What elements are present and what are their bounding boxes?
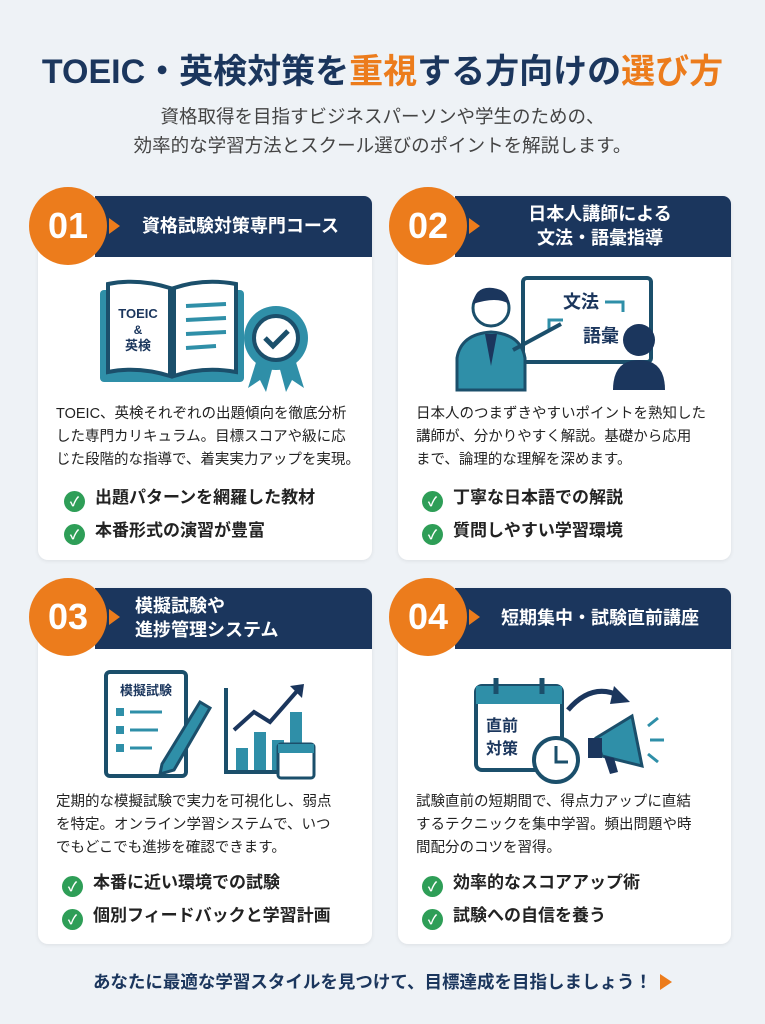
checklist 04: 効率的なスコアアップ術 [453, 873, 640, 892]
header 03: 模擬試験や [135, 596, 225, 616]
badge 04: 04 [408, 596, 448, 637]
header 02 [455, 196, 731, 257]
icon: book and badge [100, 280, 308, 392]
checklist 02: ✓ [428, 527, 437, 542]
checklist 04 [422, 873, 640, 930]
description 04 [416, 793, 692, 856]
description 01 [56, 405, 360, 468]
description 01: じた段階的な指導で、着実実力アップを実現。 [56, 452, 360, 468]
panel: 03 [38, 588, 372, 944]
badge 03: 03 [48, 596, 88, 637]
description 03: 定期的な模擬試験で実力を可視化し、弱点 [56, 794, 332, 810]
icon: teacher with board [456, 276, 665, 392]
badge 02: 02 [408, 205, 448, 246]
checklist 01: 本番形式の演習が豊富 [95, 521, 265, 540]
description 04: 試験直前の短期間で、得点力アップに直結 [416, 794, 691, 810]
description 03: を特定。オンライン学習システムで、いつ [56, 817, 330, 833]
description 02: 日本人のつまずきやすいポイントを熟知した [416, 406, 706, 422]
header 02: 日本人講師による [528, 204, 672, 224]
description 04: するテクニックを集中学習。頻出問題や時 [416, 817, 692, 833]
icon: calendar, clock, megaphone [474, 678, 664, 784]
description 01: した専門カリキュラム。目標スコアや級に応 [56, 429, 346, 445]
badge 01: 01 [48, 205, 88, 246]
badge 02 [389, 187, 480, 265]
title: TOEIC・英検対策を重視する方向けの選び方 [42, 53, 723, 91]
checklist 03: 個別フィードバックと学習計画 [93, 906, 331, 925]
icon: mock exam and chart [104, 670, 316, 780]
description 04: 間配分のコツを習得。 [416, 840, 561, 856]
description 01: TOEIC、英検それぞれの出題傾向を徹底分析 [56, 406, 347, 422]
footer message: あなたに最適な学習スタイルを見つけて、目標達成を目指しましょう！ [93, 972, 652, 992]
panel: 01 [38, 196, 372, 560]
checklist 01: 出題パターンを網羅した教材 [95, 488, 315, 507]
icon: book and badge: & [134, 323, 143, 337]
checklist 04: 試験への自信を養う [453, 906, 606, 925]
description 02: まで、論理的な理解を深めます。 [416, 452, 631, 468]
subtitle [134, 106, 631, 156]
checklist 04: ✓ [428, 912, 437, 927]
checklist 03: 本番に近い環境での試験 [93, 873, 280, 892]
header 03 [95, 588, 372, 649]
header 04: 短期集中・試験直前講座 [501, 608, 699, 628]
icon: book and badge: 英検 [125, 338, 151, 353]
checklist 01: ✓ [70, 527, 79, 542]
subtitle: 効率的な学習方法とスクール選びのポイントを解説します。 [134, 135, 631, 156]
icon: teacher with board: 語彙 [583, 326, 619, 346]
checklist 01 [64, 488, 315, 545]
panel: 04 [398, 588, 731, 944]
description 02 [416, 405, 706, 468]
header 01: 資格試験対策専門コース [142, 216, 339, 236]
icon: mock exam and chart: 模擬試験 [120, 683, 172, 698]
panel: 02 [398, 196, 731, 560]
checklist 02 [422, 488, 623, 545]
icon: calendar, clock, megaphone: 対策 [486, 739, 518, 758]
checklist 02: 質問しやすい学習環境 [453, 521, 623, 540]
icon: calendar, clock, megaphone: 直前 [486, 716, 518, 735]
icon: book and badge: TOEIC [118, 306, 158, 321]
header 02: 文法・語彙指導 [537, 228, 663, 248]
badge 04 [389, 578, 480, 656]
header 01 [95, 196, 372, 257]
badge 03 [29, 578, 120, 656]
header 04 [455, 588, 731, 649]
description 03 [56, 793, 332, 856]
checklist 03 [62, 873, 331, 930]
checklist 01: ✓ [70, 494, 79, 509]
description 03: でもどこでも進捗を確認できます。 [56, 840, 286, 856]
badge 01 [29, 187, 120, 265]
checklist 02: 丁寧な日本語での解説 [453, 488, 623, 507]
checklist 04: ✓ [428, 879, 437, 894]
icon: teacher with board: 文法 [563, 292, 599, 312]
description 02: 講師が、分かりやすく解説。基礎から応用 [416, 429, 691, 445]
checklist 03: ✓ [68, 912, 77, 927]
header 03: 進捗管理システム [135, 620, 278, 640]
checklist 02: ✓ [428, 494, 437, 509]
subtitle: 資格取得を目指すビジネスパーソンや学生のための、 [160, 106, 604, 127]
checklist 03: ✓ [68, 879, 77, 894]
